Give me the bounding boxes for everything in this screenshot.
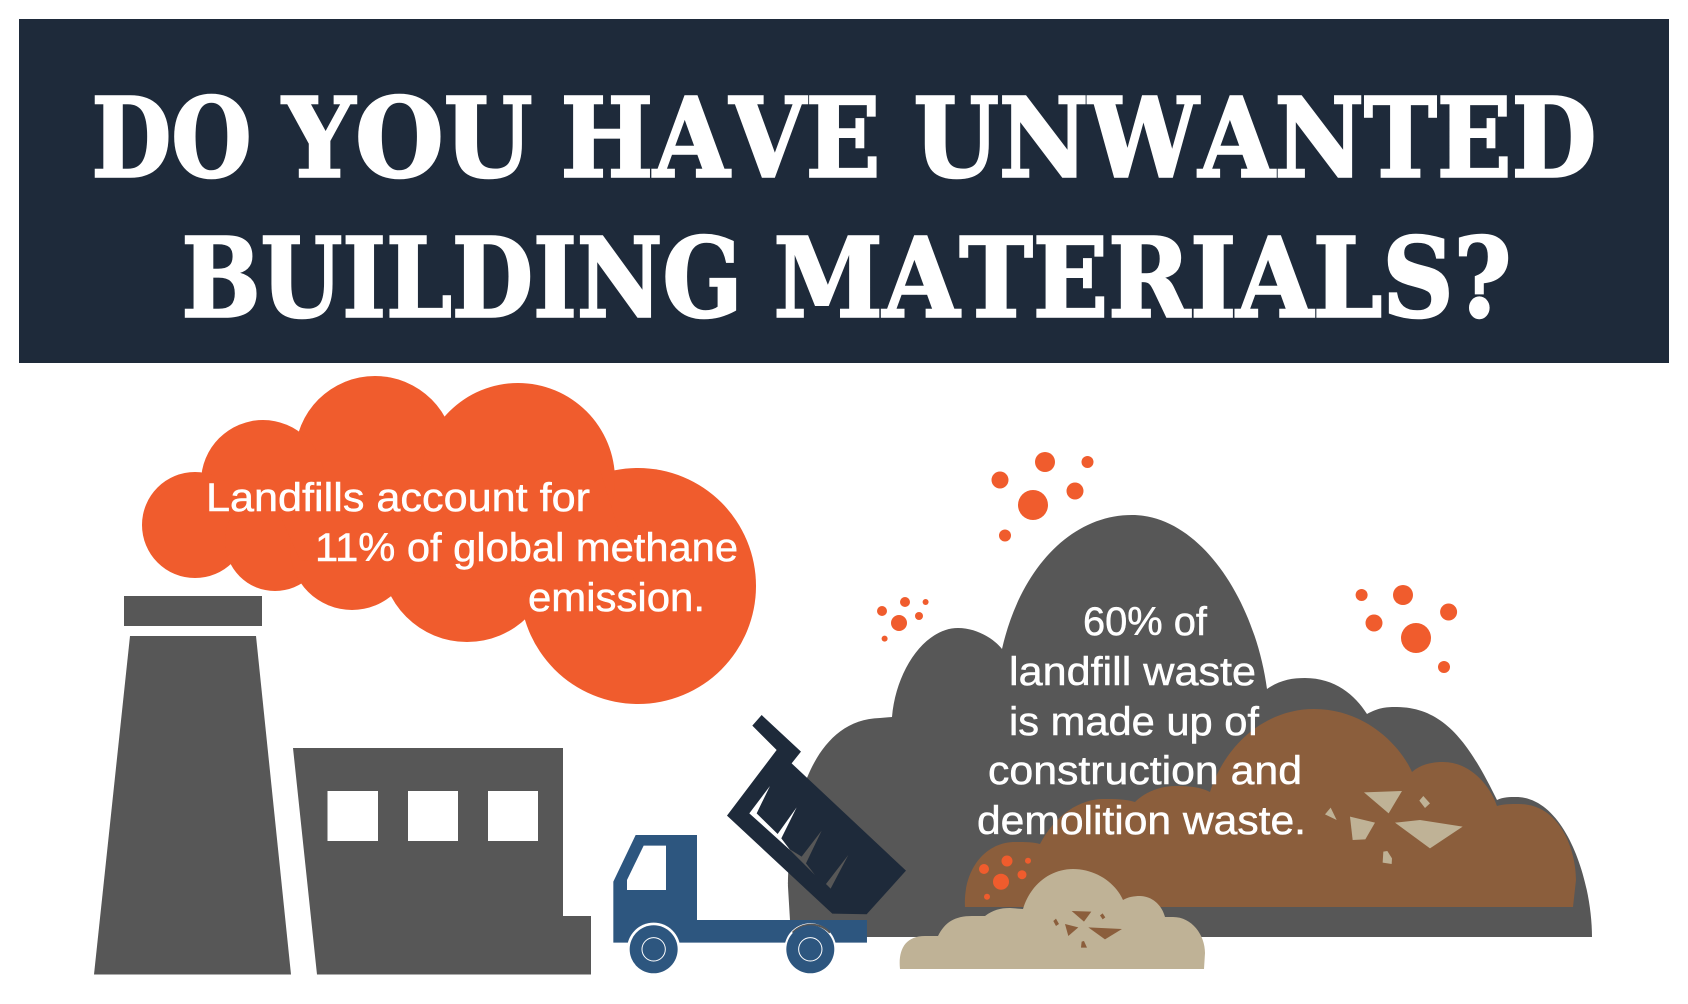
brown waste mound [965,709,1576,907]
orange dots on brown mound [979,856,1031,900]
title line 1: YOU [282,74,532,202]
tan shards on brown mound [1325,791,1463,864]
landfill waste statistic text: demolition waste. [977,799,1306,843]
methane statistic text: 11% of global methane [315,526,738,570]
front wheel [627,923,680,976]
factory [94,596,591,974]
landfill waste statistic text: construction and [988,749,1302,793]
methane statistic text: Landfills account for [206,476,590,520]
cab window [627,846,666,890]
landfill waste statistic text: is made up of [1009,700,1260,744]
landfill waste statistic text [977,600,1306,843]
title line 1: DO [92,74,252,202]
factory windows [328,791,538,841]
landfill waste statistic text: landfill waste [1009,650,1256,694]
chimney cap [124,596,262,626]
landfill waste statistic text: 60% of [1083,600,1208,644]
methane statistic text: emission. [528,576,705,620]
title line 1: HAVE [560,74,880,202]
truck cab and chassis [613,835,867,943]
rear wheel [784,923,836,975]
dump truck [613,715,906,976]
brown shards on tan mound [1053,911,1122,948]
title banner [19,19,1669,363]
orange dots small left cluster [877,597,929,642]
title line 2: BUILDING [182,214,742,342]
orange dots right cluster [1356,585,1457,673]
title line 2: MATERIALS? [774,214,1512,342]
methane statistic text [206,476,738,620]
title line 1 [92,74,1596,202]
chimney [94,636,291,974]
title line 1: UNWANTED [914,74,1596,202]
orange dots top cluster [992,452,1094,542]
title line 2 [182,214,1512,342]
tan rubble mound [900,869,1205,969]
tipping truck bed [727,715,906,914]
landfill gray mound [788,515,1592,937]
factory building [293,748,591,974]
methane smoke cloud [142,376,756,704]
